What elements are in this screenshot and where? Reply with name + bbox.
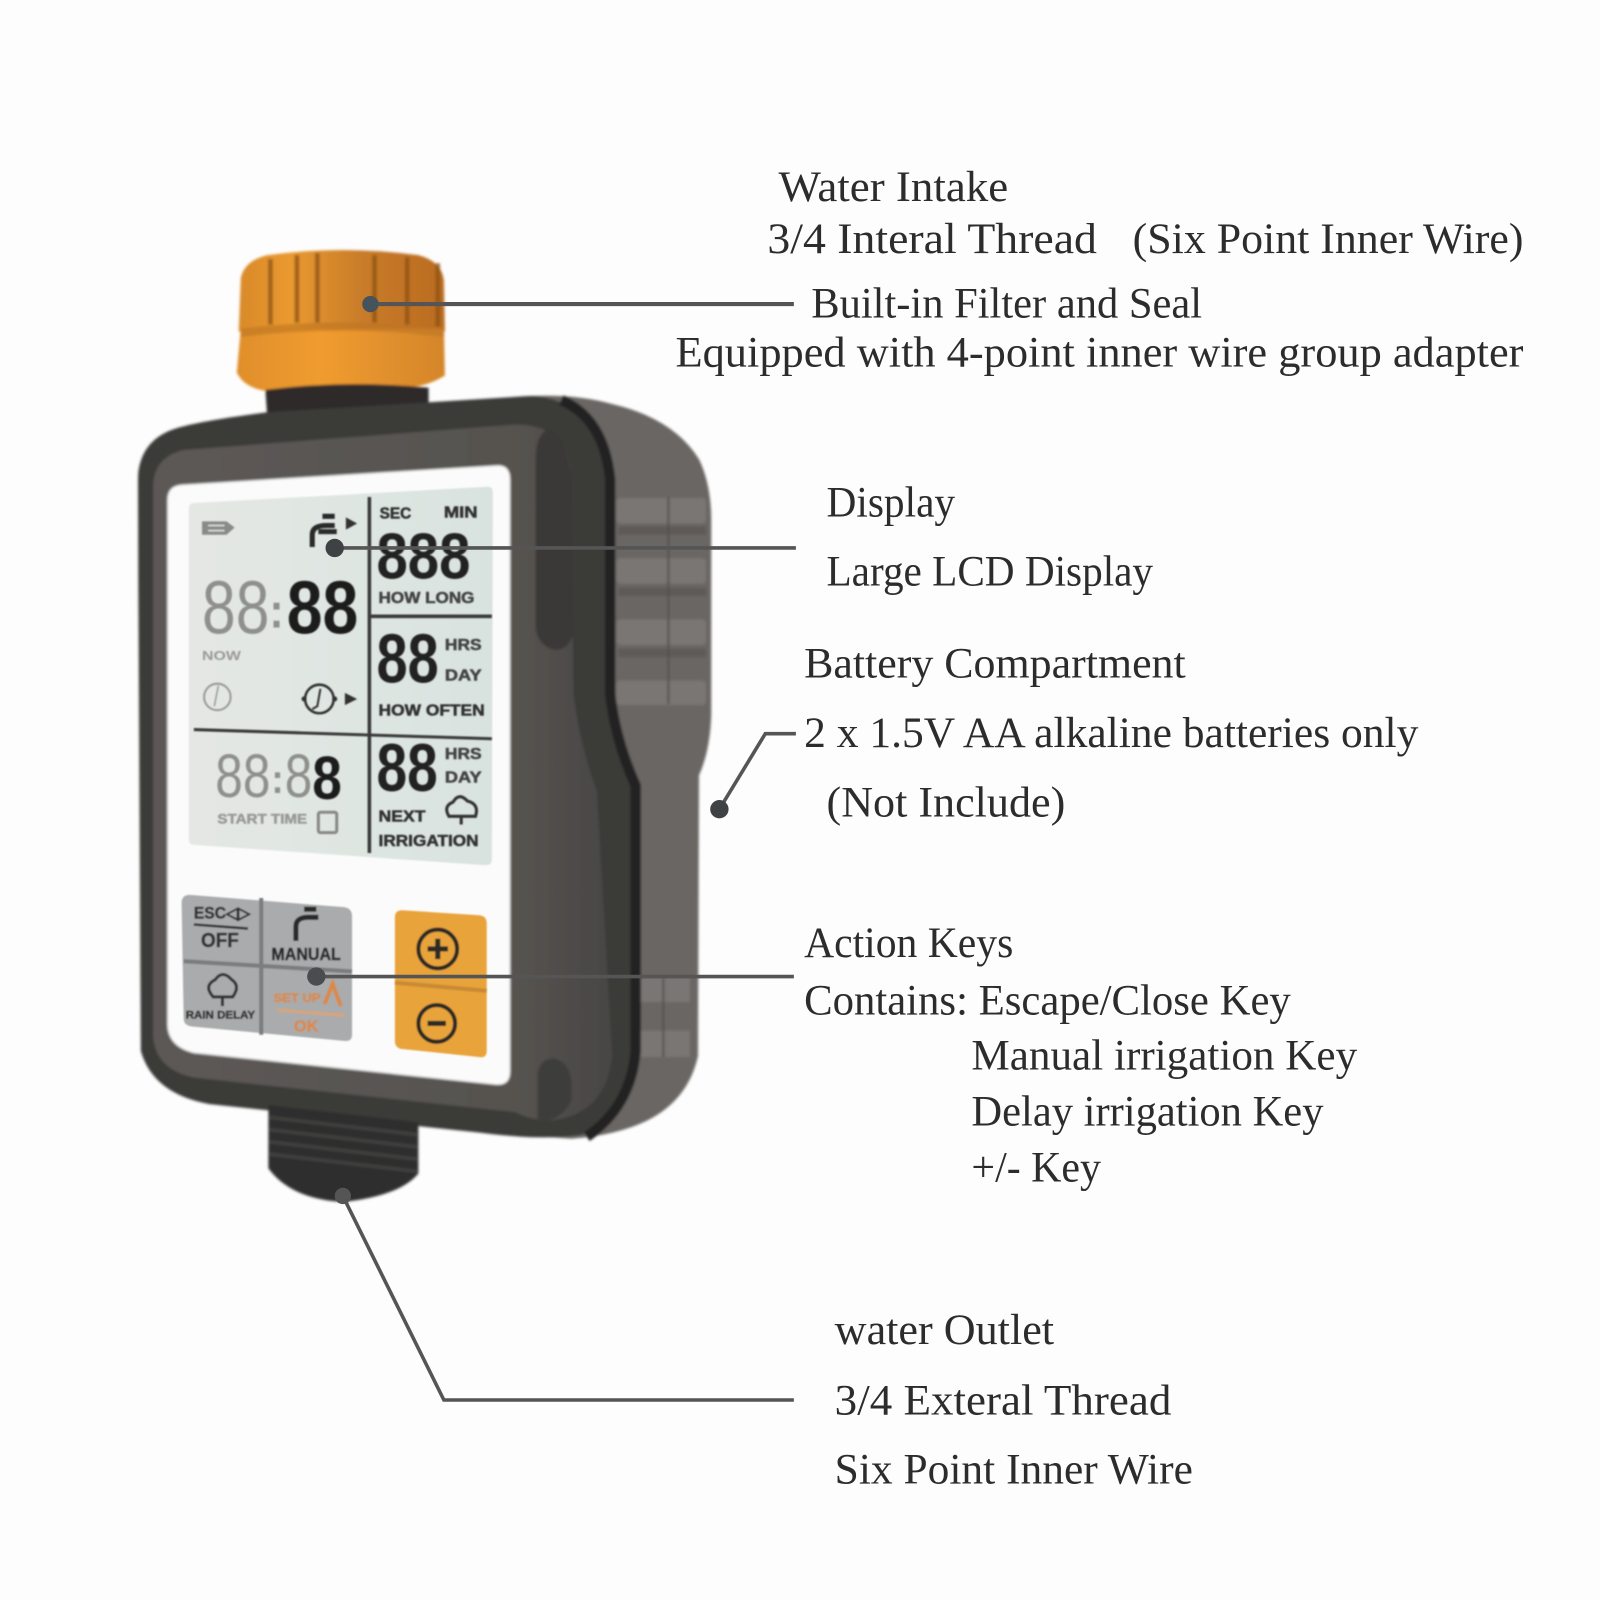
label: water intake: Built-in Filter and Seal [811,280,1202,327]
label: water intake [676,164,1523,376]
label: action keys: +/- Key [971,1145,1102,1192]
LCD dividers [194,497,492,853]
LCD readouts: HRS [445,637,482,654]
LCD readouts [202,504,485,850]
neck [265,384,429,418]
front shell [138,396,635,1137]
LCD readouts: 88 [202,567,269,651]
callout line: water intake [362,296,794,312]
label: battery compartment: Battery Compartment [804,641,1186,688]
label: display: Large LCD Display [827,549,1154,596]
side seam [561,400,636,1137]
LCD readouts: : [269,585,284,639]
MANUAL key [271,909,341,964]
callout line: water outlet [335,1188,794,1400]
LCD readouts: DAY [445,668,482,685]
orange inlet cap [237,250,445,418]
LCD icons [202,516,477,833]
label: display [827,479,1154,596]
label: action keys: Contains: Escape/Close Key [804,977,1291,1024]
outlet thread [268,1105,418,1202]
LCD readouts: 888 [377,520,470,593]
device rear housing [490,396,711,1139]
callout line: battery [710,734,796,818]
water timer device [138,250,711,1202]
ESC OFF key: OFF [201,930,239,952]
SET UP OK key [273,984,345,1036]
label: water outlet: Six Point Inner Wire [835,1447,1193,1494]
SET UP OK key: OK [294,1019,318,1036]
LCD readouts: IRRIGATION [379,833,479,850]
LCD readouts: 88 [377,731,438,806]
LCD readouts: SEC [380,505,411,522]
label: display: Display [827,479,956,526]
LCD readouts: : [271,756,284,802]
label: water intake: Equipped with 4-point inner wire group adapter [676,329,1523,376]
label: water outlet: water Outlet [835,1307,1054,1354]
label: water outlet [835,1307,1193,1494]
SET UP OK key: SET UP [273,991,320,1005]
callout line: action keys [307,967,794,986]
MANUAL key: MANUAL [271,944,341,964]
LCD readouts: HRS [445,746,482,763]
LCD readouts: 88 [215,742,270,810]
LCD readouts: 8 [312,744,342,812]
label: battery compartment: (Not Include) [827,779,1065,826]
control keys [182,895,487,1057]
LCD readouts: HOW OFTEN [379,702,485,719]
plus minus keys [395,910,487,1057]
label: water intake: (Six Point Inner Wire) [1133,216,1523,263]
ESC OFF key: ESC◁▷ [194,904,250,922]
LCD readouts: 88 [377,620,439,698]
label: action keys: Delay irrigation Key [971,1089,1324,1136]
LCD readouts: NOW [202,648,241,663]
LCD readouts: START TIME [217,811,307,827]
ESC OFF key [194,904,250,952]
dark grooves [536,429,573,650]
callout line: display [326,539,796,557]
side ribs [616,497,706,1057]
RAIN DELAY key [186,974,256,1021]
LCD readouts: NEXT [379,808,426,825]
LCD readouts: 8 [285,742,312,810]
label: action keys [804,920,1358,1192]
label: action keys: Manual irrigation Key [971,1032,1358,1079]
label: water outlet: 3/4 Exteral Thread [835,1377,1171,1424]
LCD readouts: DAY [445,770,482,787]
LCD readouts: 88 [287,567,358,651]
label: battery compartment: 2 x 1.5V AA alkaline batteries only [804,710,1419,757]
LCD readouts: HOW LONG [379,590,474,607]
gray key block [182,895,352,1041]
RAIN DELAY key: RAIN DELAY [186,1009,256,1021]
white panel [167,465,510,1085]
label: water intake: Water Intake [779,164,1008,211]
label: battery compartment [804,641,1419,826]
label: water intake: 3/4 Interal Thread [767,216,1097,263]
label: action keys: Action Keys [804,920,1013,967]
front shell inner band [153,424,612,1120]
LCD screen [189,487,493,865]
LCD readouts: MIN [444,504,478,521]
